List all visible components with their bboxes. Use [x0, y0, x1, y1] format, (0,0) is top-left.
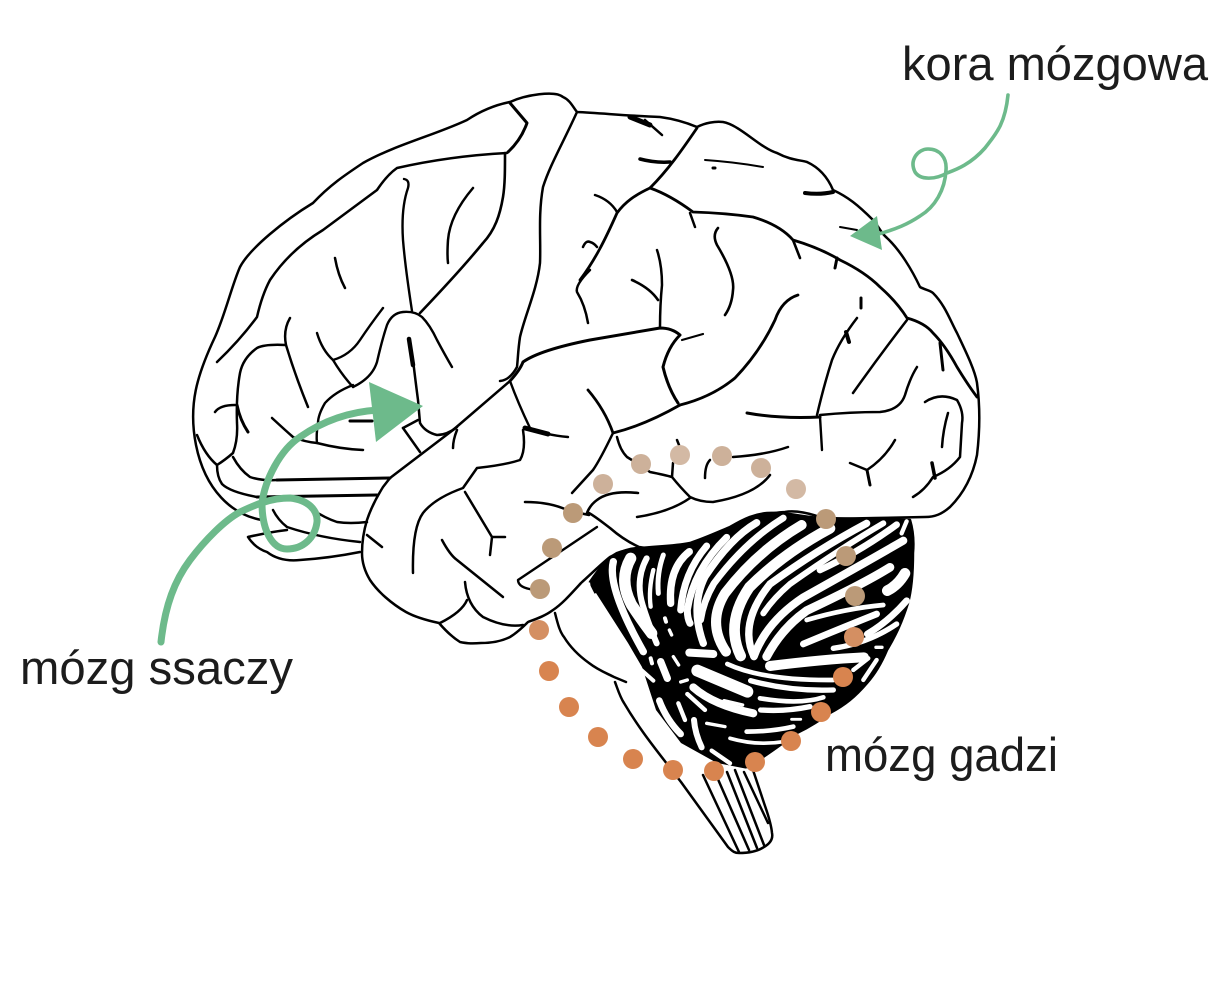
central and parietal sulci	[500, 112, 977, 497]
orange dotted boundary	[529, 620, 864, 781]
tan dotted boundary: upper row	[593, 445, 806, 499]
cerebrum outline	[193, 94, 979, 520]
brain illustration	[193, 94, 979, 853]
arrow: mózg ssaczy	[161, 382, 423, 642]
arrow: kora mózgowa	[850, 95, 1008, 250]
cerebellum white folia	[612, 518, 907, 763]
label: kora mózgowa: kora mózgowa	[902, 37, 1209, 90]
cerebellum	[590, 513, 913, 769]
tan dotted boundary: middle dots	[530, 503, 865, 606]
frontal and parietal sulci	[197, 103, 527, 560]
label: mózg ssaczy: mózg ssaczy	[20, 641, 293, 694]
brain stem	[555, 582, 772, 853]
small white gap	[580, 582, 592, 597]
temporal lobe outline	[589, 511, 825, 549]
temporal sulci	[413, 381, 788, 626]
label: mózg gadzi: mózg gadzi	[825, 728, 1058, 781]
